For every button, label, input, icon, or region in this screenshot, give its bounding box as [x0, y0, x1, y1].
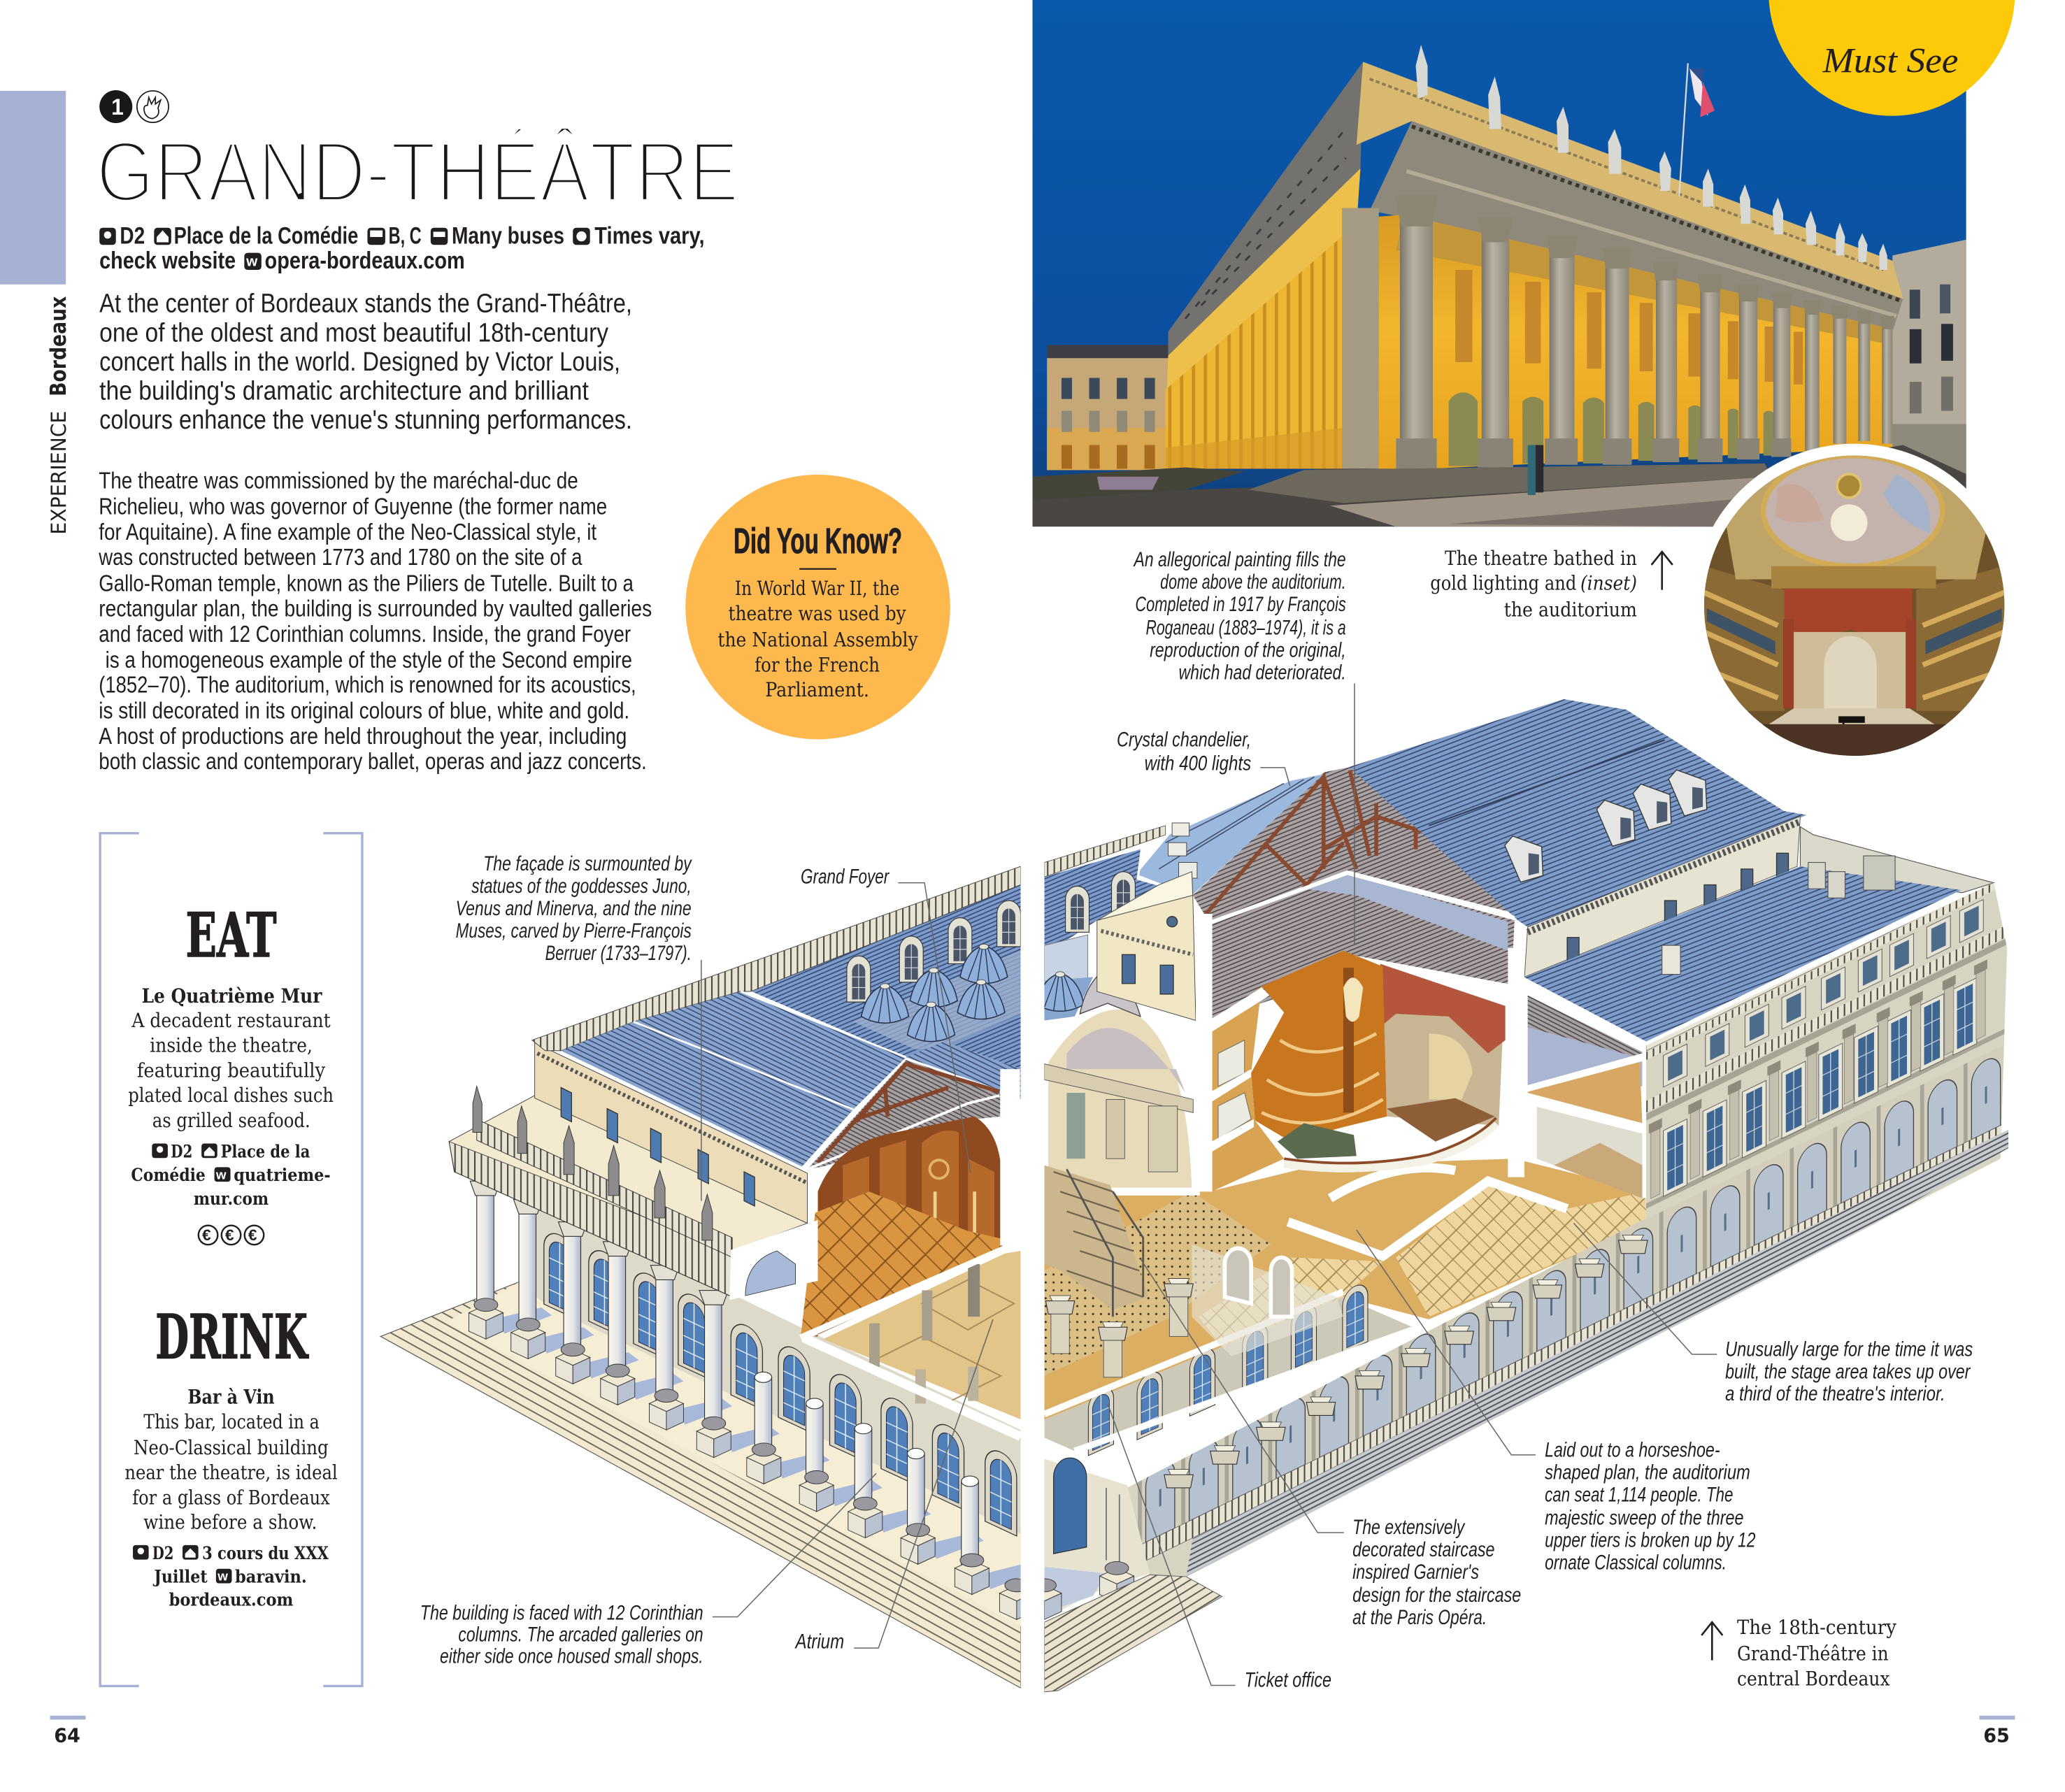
- terrace floor: [449, 1096, 807, 1251]
- right steps: [1044, 1575, 1222, 1692]
- eat listing: [128, 984, 334, 1209]
- white pier blocks: [1045, 1279, 1193, 1377]
- callout: did you know: Parliament.: [765, 678, 869, 701]
- drink listing: Neo-Classical building: [134, 1436, 329, 1459]
- introduction text: At the center of Bordeaux stands the Grand-Théâtre,: [99, 288, 632, 317]
- label: staircase: at the Paris Opéra.: [1352, 1607, 1487, 1629]
- price rating: €: [225, 1226, 234, 1244]
- portico floor: [446, 1282, 1021, 1626]
- drink listing: baravin.: [235, 1566, 307, 1587]
- callout: did you know: for the French: [755, 653, 880, 676]
- right facade: [1120, 852, 2028, 1619]
- panel: eat and drink: [100, 833, 362, 1686]
- column shadows: [499, 1307, 1038, 1589]
- eat listing: quatrieme-: [234, 1164, 331, 1185]
- illustration: right half of cutaway: [1027, 699, 2028, 1692]
- illustration: left half of cutaway: [380, 866, 1038, 1688]
- tiled stage floor: [1396, 1185, 1646, 1317]
- label: staircase: design for the staircase: [1352, 1584, 1521, 1607]
- foyer attic with truss: [807, 1060, 1000, 1169]
- callout: did you know: In World War II, the: [735, 577, 899, 600]
- practical information: w: [245, 253, 258, 269]
- lattice frieze: [1120, 1112, 2028, 1574]
- photo: theatre at dusk: [1032, 0, 1966, 526]
- label: facade statues: Venus and Minerva, and the nine: [456, 898, 692, 920]
- facade base stripes: [1186, 1130, 2008, 1577]
- drink listing: wine before a show.: [143, 1510, 317, 1533]
- photo caption: The theatre bathed in: [1445, 547, 1637, 570]
- number and must-see icons: 1: [111, 94, 124, 120]
- patterned floor: [1199, 1257, 1382, 1349]
- body text: rectangular plan, the building is surrounded by vaulted galleries: [99, 595, 652, 621]
- grey ceiling void: [1209, 873, 1515, 1020]
- drink listing: 3 cours du XXX: [202, 1542, 329, 1563]
- terrace statues: [473, 1087, 713, 1240]
- practical information: Times vary,: [594, 222, 705, 249]
- horseshoe wall: [1284, 1123, 1496, 1168]
- caption: painted dome: which had deteriorated.: [1179, 662, 1346, 684]
- label: staircase: [1141, 1259, 1521, 1629]
- drink listing: w: [217, 1569, 228, 1584]
- foyer parquet floor: [801, 1191, 1021, 1336]
- practical information: D2: [120, 222, 145, 249]
- eat listing: plated local dishes such: [128, 1084, 334, 1107]
- practical information: B, C: [389, 222, 422, 249]
- section tab: [0, 91, 66, 285]
- eat listing: Comédie: [131, 1164, 206, 1185]
- label: facade statues: [456, 853, 701, 1200]
- heading: drink: DRINK: [155, 1302, 309, 1372]
- label: ticket office: Ticket office: [1245, 1669, 1331, 1691]
- label: horseshoe auditorium: upper tiers is broken up by 12: [1545, 1530, 1755, 1552]
- side wing: [1166, 62, 1363, 468]
- body text: is a homogeneous example of the style of the Second empire: [106, 647, 632, 673]
- caption: painted dome: Completed in 1917 by François: [1135, 594, 1346, 616]
- parapet: [532, 866, 1021, 1051]
- attic with timber trusses: [1193, 767, 1515, 922]
- eat listing: Place de la: [221, 1140, 310, 1161]
- practical information: Many buses: [452, 222, 564, 249]
- drink listing: near the theatre, is ideal: [124, 1461, 338, 1484]
- label: facade statues: Muses, carved by Pierre-François: [456, 920, 692, 942]
- colonnade wall: [520, 1191, 1021, 1536]
- stage floor: [1387, 1098, 1495, 1142]
- caption: painted dome: reproduction of the original,: [1150, 640, 1346, 662]
- body text: both classic and contemporary ballet, operas and jazz concerts.: [99, 748, 647, 774]
- label: horseshoe auditorium: [1357, 1230, 1755, 1575]
- label: grand foyer: [801, 866, 971, 1173]
- introduction text: one of the oldest and most beautiful 18th-century: [99, 318, 608, 347]
- photo caption: (inset): [1580, 572, 1637, 595]
- body text: and faced with 12 Corinthian columns. Inside, the grand Foyer: [99, 621, 631, 647]
- stage curtain: [1380, 963, 1506, 1054]
- page number 64: 64: [54, 1725, 80, 1747]
- inset photo: auditorium: [1703, 443, 2004, 756]
- eat listing: D2: [171, 1140, 192, 1161]
- body text: Richelieu, who was governor of Guyenne (the former name: [99, 493, 607, 519]
- label: stage area: Unusually large for the time it was: [1725, 1339, 1973, 1361]
- eat listing: w: [215, 1167, 227, 1182]
- stage side room: [1528, 996, 1642, 1198]
- callout: did you know: theatre was used by: [728, 602, 906, 625]
- practical information: Place de la Comédie: [174, 222, 358, 249]
- vertical section label: EXPERIENCE: [47, 411, 71, 535]
- caption: painted dome: An allegorical painting fills the: [1133, 549, 1346, 571]
- photo caption: gold lighting and: [1430, 572, 1576, 595]
- title: GRAND-THÉÂTRE: [96, 124, 739, 220]
- stage house wall: [1524, 817, 1800, 977]
- price rating: [199, 1226, 264, 1245]
- entablature: [449, 1135, 732, 1297]
- caption: illustration: central Bordeaux: [1737, 1667, 1890, 1690]
- page number 65: [1980, 1716, 2015, 1747]
- stage set: [1382, 970, 1504, 1126]
- interior floor: [1044, 1159, 1646, 1422]
- central walls: [1288, 1168, 1567, 1256]
- steps and forecourt: [1032, 445, 1966, 526]
- white section walls: [1196, 914, 1655, 1198]
- body text: was constructed between 1773 and 1780 on the site of a: [98, 544, 583, 570]
- grand foyer hall: [814, 1117, 1018, 1336]
- grand staircase hall: [1044, 1005, 1196, 1191]
- gable pavilion: [1097, 872, 1196, 1020]
- label: staircase: The extensively: [1352, 1517, 1466, 1539]
- eat listing: as grilled seafood.: [152, 1109, 310, 1132]
- vertical section label: Bordeaux: [46, 296, 71, 396]
- caption: painted dome: Roganeau (1883–1974), it is a: [1145, 617, 1346, 640]
- body text: is still decorated in its original colours of blue, white and gold.: [99, 697, 629, 723]
- corridor wall with windows: [1044, 1280, 1416, 1477]
- ground floor arches: [1138, 1043, 2007, 1546]
- label: horseshoe auditorium: majestic sweep of the three: [1545, 1507, 1743, 1530]
- label: stage area: a third of the theatre's interior.: [1725, 1383, 1945, 1405]
- label: horseshoe auditorium: ornate Classical columns.: [1545, 1552, 1727, 1575]
- upper windows: [1664, 899, 1983, 1087]
- label: corinthian columns: The building is faced with 12 Corinthian: [420, 1602, 703, 1624]
- drink listing: This bar, located in a: [143, 1410, 320, 1433]
- caption: illustration: [1737, 1616, 1896, 1690]
- label: crystal chandelier: [1117, 729, 1290, 786]
- photo caption: [1430, 547, 1637, 621]
- drink listing: Bar à Vin: [187, 1384, 275, 1408]
- left background building: [1047, 345, 1168, 470]
- right background building: [1892, 240, 1966, 474]
- dotted vestibule floor: [1044, 1191, 1271, 1376]
- chandelier: [1343, 977, 1363, 1022]
- practical information: [99, 222, 705, 274]
- corner entrance bay: [1027, 1458, 1150, 1619]
- main roof: [1349, 699, 1807, 927]
- label: corinthian columns: [420, 1473, 876, 1668]
- number and must-see icons: [99, 90, 169, 123]
- portico columns: [469, 1181, 1034, 1619]
- introduction text: [99, 288, 632, 434]
- callout: did you know: [685, 475, 950, 739]
- eat listing: A decadent restaurant: [131, 1009, 331, 1032]
- label: atrium: Atrium: [794, 1631, 844, 1654]
- pier caps on cut wall: [1164, 1235, 1648, 1488]
- body text: The theatre was commissioned by the maréchal-duc de: [99, 468, 578, 494]
- side chambers: [1212, 986, 1284, 1191]
- boxes tiers: [1251, 951, 1387, 1142]
- auditorium: [1251, 951, 1506, 1168]
- eat listing: inside the theatre,: [150, 1034, 313, 1057]
- side wing roof: [1524, 856, 1961, 1042]
- rear terrace: [1800, 827, 1994, 893]
- body text: [98, 468, 652, 774]
- body text: Gallo-Roman temple, known as the Piliers de Tutelle. Built to a: [99, 571, 634, 596]
- front steps: [380, 1282, 1021, 1688]
- label: atrium: [794, 1319, 993, 1654]
- label: ticket office: [1108, 1403, 1331, 1691]
- label: grand foyer: Grand Foyer: [801, 866, 889, 889]
- rear roof strip with dormers: [1036, 826, 1192, 1020]
- drink listing: for a glass of Bordeaux: [132, 1486, 330, 1510]
- arrow: photo above: [1652, 552, 1673, 590]
- introduction text: concert halls in the world. Designed by Victor Louis,: [99, 347, 620, 376]
- label: crystal chandelier: with 400 lights: [1145, 753, 1251, 775]
- label: staircase: inspired Garnier's: [1352, 1561, 1479, 1584]
- practical information: check website: [99, 248, 236, 274]
- caption: illustration: The 18th-century: [1737, 1616, 1896, 1639]
- body text: (1852–70). The auditorium, which is renowned for its acoustics,: [99, 672, 636, 698]
- lower hall floor: [823, 1251, 1021, 1419]
- caption: illustration: Grand-Théâtre in: [1737, 1642, 1889, 1665]
- body text: A host of productions are held throughout the year, including: [99, 723, 627, 749]
- label: horseshoe auditorium: Laid out to a horseshoe-: [1545, 1440, 1720, 1462]
- rear roof with skylights: [752, 884, 1021, 1099]
- must see badge: [1769, 0, 2015, 116]
- stalls: [1278, 1123, 1357, 1159]
- front facade: [1342, 62, 1903, 471]
- drink listing: D2: [152, 1542, 173, 1563]
- rooftop statues: [1416, 45, 1887, 270]
- leader: painted dome: [1354, 683, 1355, 945]
- practical information: opera-bordeaux.com: [265, 248, 465, 274]
- inner arcade: [1192, 1245, 1343, 1356]
- drink listing: [124, 1384, 338, 1610]
- label: stage area: built, the stage area takes up over: [1725, 1361, 1971, 1384]
- must see badge: Must See: [1822, 41, 1958, 80]
- eat listing: featuring beautifully: [137, 1059, 325, 1082]
- upper storey wall: [535, 1042, 807, 1223]
- drink listing: bordeaux.com: [169, 1589, 294, 1610]
- callout: did you know: the National Assembly: [717, 629, 918, 652]
- label: horseshoe auditorium: shaped plan, the auditorium: [1545, 1462, 1750, 1484]
- page number 65: 65: [1983, 1725, 2010, 1747]
- label: corinthian columns: columns. The arcaded galleries on: [458, 1623, 703, 1646]
- caption: painted dome: [1133, 549, 1346, 684]
- vault section: [745, 1251, 796, 1296]
- label: facade statues: The façade is surmounted by: [483, 853, 693, 875]
- label: horseshoe auditorium: can seat 1,114 people. The: [1545, 1484, 1733, 1507]
- price rating: €: [248, 1226, 257, 1244]
- eat listing: mur.com: [194, 1188, 269, 1209]
- cupola: [1080, 968, 1141, 1017]
- introduction text: colours enhance the venue's stunning performances.: [99, 405, 632, 434]
- cut walls: [731, 1069, 1021, 1437]
- terrace balustrade: [477, 1119, 732, 1257]
- label: facade statues: statues of the goddesses Juno,: [471, 875, 692, 898]
- flag: [1679, 63, 1715, 196]
- introduction text: the building's dramatic architecture and brilliant: [99, 376, 589, 406]
- heading: eat: EAT: [186, 901, 276, 971]
- callout: did you know: Did You Know?: [734, 521, 902, 561]
- colonnade: [1394, 195, 1894, 470]
- label: corinthian columns: either side once housed small shops.: [440, 1645, 703, 1668]
- staircase: [1044, 1166, 1148, 1317]
- eat listing: Le Quatrième Mur: [141, 984, 322, 1008]
- label: staircase: decorated staircase: [1352, 1539, 1495, 1561]
- front roof: [561, 991, 906, 1166]
- domed roof section: [1136, 774, 1324, 896]
- label: crystal chandelier: Crystal chandelier,: [1117, 729, 1251, 752]
- label: facade statues: Berruer (1733–1797).: [545, 942, 692, 965]
- vertical section label: [46, 296, 71, 535]
- page number 64: [50, 1716, 85, 1747]
- caption: painted dome: dome above the auditorium.: [1160, 571, 1346, 594]
- body text: for Aquitaine). A fine example of the Neo-Classical style, it: [99, 519, 596, 545]
- price rating: €: [202, 1226, 211, 1244]
- drink listing: Juillet: [153, 1566, 208, 1587]
- tall windows and pilasters: [1649, 959, 1987, 1203]
- night sky: [1032, 0, 1966, 526]
- arrow: illustration above: [1701, 1622, 1722, 1661]
- label: stage area: [1574, 1223, 1973, 1405]
- photo caption: the auditorium: [1504, 598, 1637, 621]
